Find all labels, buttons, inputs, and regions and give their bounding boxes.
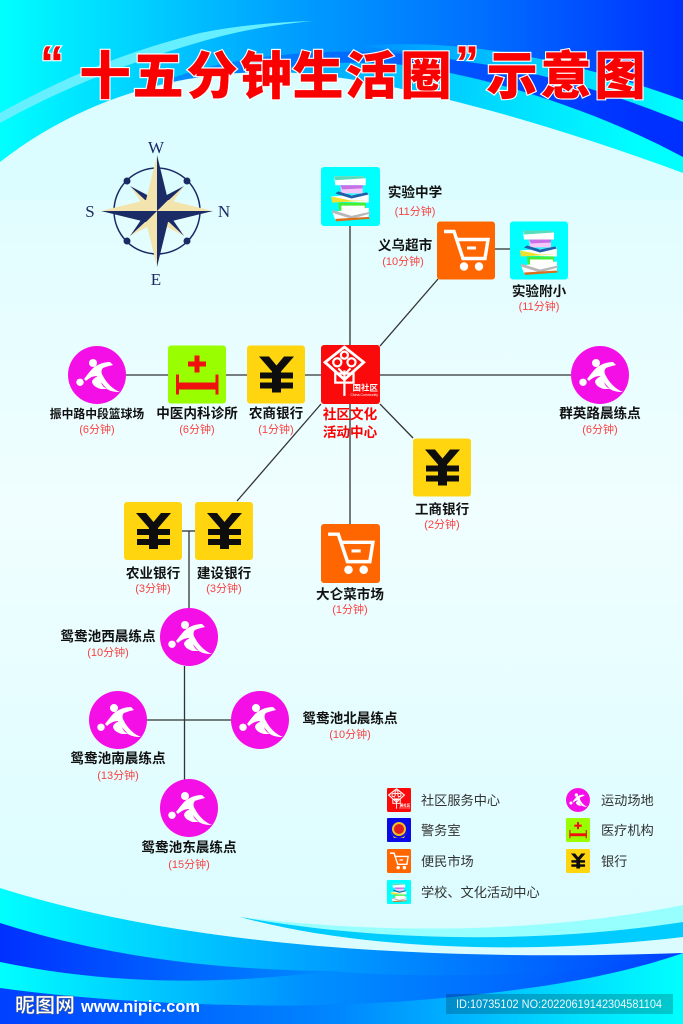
node: 鸳鸯池西晨练点 [60, 608, 218, 666]
node: 实验中学 [321, 167, 442, 226]
legend: 运动场地 [566, 788, 654, 812]
legend [387, 788, 654, 904]
node: 大仑菜市场 [316, 524, 384, 616]
node: 振中路中段篮球场 [50, 346, 144, 436]
legend: 银行: 银行 [601, 854, 627, 869]
light streak [0, 21, 313, 123]
node: 实验附小: 实验附小 [512, 283, 567, 299]
node: 中医内科诊所: 中医内科诊所 [156, 405, 238, 421]
legend: 学校、文化活动中心: 学校、文化活动中心 [421, 884, 540, 900]
compass [101, 155, 213, 267]
node: 农业银行: 农业银行 [126, 566, 181, 581]
title: 示意图 [486, 48, 646, 105]
node: 建设银行: 建设银行 [197, 565, 252, 581]
watermark logo [15, 995, 200, 1017]
title: 十五分钟生活圈 [79, 48, 452, 105]
node: 鸳鸯池西晨练点: (10分钟) [87, 645, 129, 659]
node: 义乌超市: (10分钟) [382, 254, 424, 268]
node: 鸳鸯池北晨练点 [231, 691, 398, 749]
node: 农业银行: (3分钟) [135, 581, 171, 595]
node: 鸳鸯池北晨练点: (10分钟) [329, 727, 371, 741]
watermark logo: www.nipic.com [80, 998, 200, 1016]
node: 工商银行 [413, 438, 471, 531]
legend: 学校、文化活动中心 [387, 880, 540, 904]
blue band [170, 52, 683, 157]
node: 建设银行: (3分钟) [206, 581, 242, 595]
node: 工商银行: (2分钟) [424, 517, 460, 531]
legend: 医疗机构: 医疗机构 [601, 823, 654, 838]
legend: 警务室 [387, 818, 461, 842]
node: 农商银行: 农商银行 [249, 405, 304, 421]
node: 鸳鸯池南晨练点: 鸳鸯池南晨练点 [70, 750, 166, 766]
title: 十五分钟生活圈 [79, 48, 452, 105]
connector lines [126, 226, 571, 780]
node: 实验中学: 实验中学 [388, 184, 442, 200]
node: 农业银行 [124, 502, 182, 595]
watermark logo: 昵图网 [15, 995, 75, 1017]
node: 社区文化活动中心: 活动中心 [323, 424, 378, 440]
legend: 医疗机构 [566, 818, 654, 842]
node: 鸳鸯池东晨练点: (15分钟) [168, 857, 210, 871]
compass letters: E [151, 270, 161, 289]
node: 群英路晨练点: 群英路晨练点 [559, 405, 641, 421]
node: 群英路晨练点 [559, 346, 641, 436]
image ID strip: ID:10735102 NO:20220619142304581104 [456, 999, 663, 1011]
legend: 社区服务中心: 社区服务中心 [421, 793, 500, 808]
legend: 便民市场 [387, 849, 474, 873]
node: 鸳鸯池南晨练点 [70, 691, 166, 782]
legend: 银行 [566, 849, 627, 873]
upper cyan stripe [360, 44, 683, 122]
node: 义乌超市 [378, 222, 495, 280]
node: 大仑菜市场: 大仑菜市场 [316, 586, 384, 602]
node: 鸳鸯池西晨练点: 鸳鸯池西晨练点 [60, 628, 156, 644]
lower cyan stripe [250, 63, 683, 190]
node: 农商银行: (1分钟) [258, 422, 294, 436]
compass letters: W [148, 138, 165, 157]
node: 鸳鸯池北晨练点: 鸳鸯池北晨练点 [302, 710, 398, 726]
title: “ [40, 36, 64, 89]
node: 振中路中段篮球场: (6分钟) [79, 422, 115, 436]
title: 示意图 [486, 48, 646, 105]
node: 社区文化活动中心 [321, 345, 380, 440]
light body edge [0, 72, 683, 200]
node: 社区文化活动中心: 社区文化 [323, 406, 378, 422]
bottom waves [0, 888, 683, 1024]
compass letters: S [85, 202, 95, 221]
node: 义乌超市: 义乌超市 [378, 237, 433, 253]
title: “ [40, 36, 64, 89]
top banner waves [0, 0, 683, 200]
node: 中医内科诊所 [156, 346, 238, 436]
image ID strip [446, 994, 673, 1014]
legend: 运动场地: 运动场地 [601, 793, 654, 808]
compass letters: N [218, 202, 230, 221]
title [40, 36, 646, 105]
title: ” [455, 36, 479, 89]
node: 大仑菜市场: (1分钟) [332, 602, 368, 616]
node: 振中路中段篮球场: 振中路中段篮球场 [50, 407, 144, 421]
node: 实验附小: (11分钟) [519, 299, 559, 313]
node: 鸳鸯池东晨练点: 鸳鸯池东晨练点 [141, 839, 237, 855]
legend: 便民市场: 便民市场 [421, 853, 474, 869]
node: 工商银行: 工商银行 [415, 501, 470, 517]
node: 群英路晨练点: (6分钟) [582, 422, 618, 436]
node: 中医内科诊所: (6分钟) [179, 422, 215, 436]
node: 实验附小 [510, 222, 568, 313]
node: 建设银行 [195, 502, 253, 595]
node: 鸳鸯池南晨练点: (13分钟) [97, 768, 139, 782]
legend: 社区服务中心 [387, 788, 500, 812]
node: 农商银行 [247, 346, 305, 436]
node: 实验中学: (11分钟) [395, 204, 435, 218]
compass letters [85, 138, 230, 289]
node: 鸳鸯池东晨练点 [141, 779, 237, 871]
legend: 警务室: 警务室 [421, 822, 461, 838]
title: ” [455, 36, 479, 89]
